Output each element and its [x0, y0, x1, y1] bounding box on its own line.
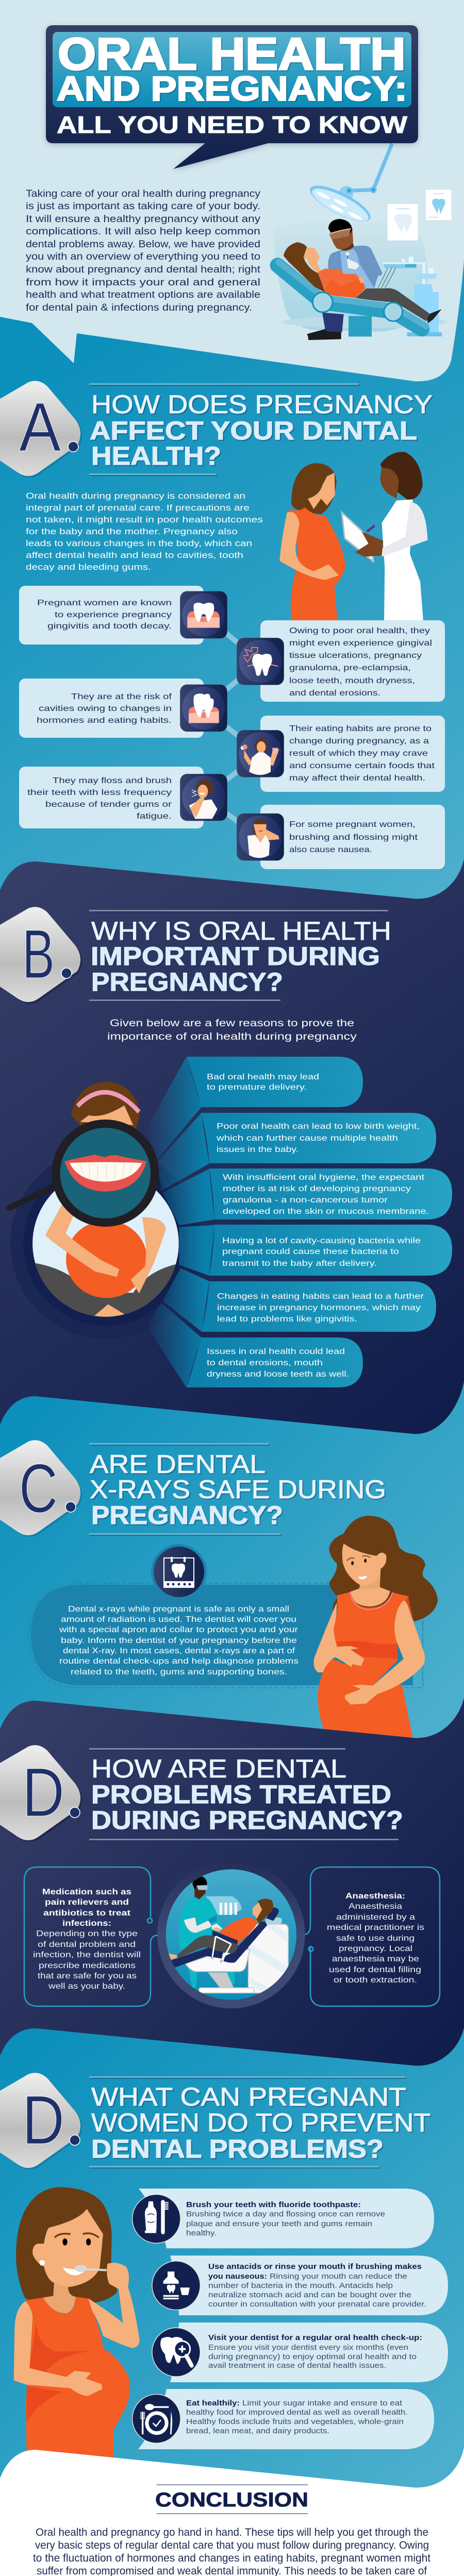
card: nausea: also cause nausea. — [289, 845, 372, 854]
tip pill: antacids: counter in consultation with your prenatal care provider. — [208, 2300, 426, 2309]
tip pill: eat healthily: Healthy foods include fruits and vegetables, whole-grain — [186, 2418, 404, 2426]
heading B — [89, 910, 391, 1001]
card: nausea — [260, 805, 445, 869]
title text: AND PREGNANCY: — [57, 70, 407, 108]
intro paragraph: know about pregnancy and dental health; right — [26, 264, 261, 275]
section B intro text: Given below are a few reasons to prove the — [110, 1018, 354, 1029]
pill: bacteria transmission — [209, 1225, 452, 1276]
x-ray info panel: routine dental check-ups and help diagnose problems — [59, 1657, 299, 1666]
card: nausea: brushing and flossing might — [289, 833, 418, 842]
box: anaesthesia: used for dental filling — [329, 1965, 421, 1974]
card: eating habits: and consume certain foods that — [289, 761, 435, 770]
card: less brushing: They may floss and brush — [53, 776, 172, 785]
card: gingivitis: Pregnant women are known — [37, 599, 172, 607]
box: anaesthesia: pregnancy. Local — [339, 1944, 412, 1953]
card: eating habits: result of which they may crave — [289, 749, 428, 758]
heading D second: WOMEN DO TO PREVENT — [91, 2108, 430, 2137]
section C: are dental x-rays safe — [0, 1381, 464, 1752]
section A paragraph: not taken, it might result in poor health outcomes — [26, 515, 263, 524]
card: ulcerations: granuloma, pre-eclampsia, — [289, 664, 411, 672]
icon: woman craving food — [237, 730, 284, 777]
pill: low birth weight: Poor oral health can lead to low birth weight, — [217, 1122, 420, 1131]
box: medication: of dental problem and — [38, 1940, 136, 1949]
tip pill: antacids: number of bacteria in the mouth. Antacids help — [208, 2282, 393, 2290]
pill: bacteria transmission: Having a lot of cavity-causing bacteria while — [222, 1236, 421, 1245]
heading D second — [89, 2076, 430, 2167]
box: medication: well as your baby. — [48, 1982, 125, 1991]
card: nausea: For some pregnant women, — [289, 820, 416, 829]
box: anaesthesia: Anaesthesia: — [345, 1892, 405, 1901]
heading A: HEALTH? — [91, 442, 221, 470]
box: medication: pain relievers and — [45, 1898, 129, 1907]
conclusion paragraph: to the fluctuation of hormones and changes in eating habits, pregnant women might — [33, 2552, 430, 2564]
tip pill: eat healthily: healthy food for improved dental as well as overall health. — [186, 2409, 408, 2417]
intro paragraph: Taking care of your oral health during pregnancy — [26, 189, 261, 199]
tip pill: eat healthily: Eat healthily: — [186, 2399, 240, 2408]
pill: erosions: Issues in oral health could lead — [207, 1347, 345, 1356]
conclusion paragraph: Oral health and pregnancy go hand in hand. These tips will help you get through the — [36, 2527, 428, 2538]
heading C — [89, 1443, 386, 1535]
box: anaesthesia: safe to use during — [336, 1934, 415, 1943]
illustration: pregnant woman brushing teeth — [14, 2187, 140, 2458]
card: ulcerations: tissue ulcerations, pregnancy — [289, 651, 422, 660]
section B intro text: importance of oral health during pregnancy — [107, 1031, 357, 1042]
card: less brushing — [19, 767, 204, 828]
card: cavities — [19, 679, 204, 738]
badge A: A — [19, 389, 61, 466]
section A paragraph: affect dental health and lead to cavities, tooth — [26, 551, 243, 560]
box: anaesthesia: anaesthesia may be — [332, 1955, 419, 1963]
pill: bacteria transmission: transmit to the baby after delivery. — [222, 1259, 377, 1268]
tip pill: antacids — [170, 2256, 448, 2315]
card: less brushing: fatigue. — [137, 812, 172, 821]
x-ray info panel: amount of radiation is used. The dentist will cover you — [61, 1615, 296, 1624]
badge B: B — [22, 916, 55, 993]
icon: tooth with inflamed gum — [180, 591, 227, 638]
badge D — [0, 1745, 82, 1842]
section A paragraph: for the baby and the mother. Pregnancy also — [26, 527, 238, 536]
x-ray info panel: with a special apron and collar to protect you and your — [59, 1625, 299, 1634]
icon: tooth under magnifier — [152, 2328, 200, 2377]
pill: eating habits — [202, 1281, 436, 1332]
badge C: C — [19, 1450, 58, 1527]
tip pill: fluoride toothpaste — [139, 2189, 434, 2248]
card: cavities: cavities owing to changes in — [39, 704, 172, 713]
tip pill: visit dentist: Visit your dentist for a regular oral health check-up: — [208, 2334, 422, 2342]
heading C: ARE DENTAL — [90, 1450, 266, 1479]
conclusion paragraph — [33, 2527, 430, 2576]
box: medication: Medication such as — [42, 1888, 131, 1896]
card: cavities: They are at the risk of — [71, 692, 172, 701]
heading D second: WHAT CAN PREGNANT — [91, 2082, 406, 2111]
intro paragraph — [26, 189, 261, 313]
conclusion heading: CONCLUSION — [155, 2489, 308, 2511]
section A: how pregnancy affects dental health — [0, 260, 464, 917]
title speech bubble — [46, 25, 418, 169]
card: gingivitis: gingivitis and tooth decay. — [47, 622, 172, 631]
section A paragraph: integral part of prenatal care. If precautions are — [26, 503, 250, 513]
tip pill: visit dentist: during pregnancy) to enjoy optimal oral health and to — [208, 2353, 417, 2361]
background: header panel — [0, 0, 464, 422]
illustration: dentist treating pregnant patient — [273, 143, 451, 340]
card: eating habits: change during pregnancy, as a — [289, 737, 429, 745]
section A paragraph: leads to various changes in the body, which can — [26, 539, 252, 548]
section: conclusion — [0, 2447, 464, 2576]
conclusion paragraph: very basic steps of regular dental care that you must follow during pregnancy. Owing — [35, 2539, 429, 2551]
tip pill: fluoride toothpaste: healthy. — [186, 2229, 217, 2238]
heading B: WHY IS ORAL HEALTH — [91, 917, 391, 945]
box: medication: infection, the dentist will — [33, 1951, 141, 1959]
pill: erosions: dryness and loose teeth as well. — [207, 1370, 349, 1379]
illustration: pregnant woman smiling — [313, 1516, 438, 1738]
card: ulcerations: and dental erosions. — [289, 689, 380, 698]
tip pill: antacids: neutralize stomach acid and can be bought over the — [208, 2291, 411, 2299]
tip pill: visit dentist: Ensure you visit your dentist every six months (even — [208, 2344, 408, 2352]
heading C: X-RAYS SAFE DURING — [90, 1475, 386, 1504]
card: gingivitis: to experience pregnancy — [55, 611, 172, 619]
x-ray info panel: dental X-ray. In most cases, dental x-rays are a part of — [63, 1647, 295, 1655]
icon: mouth rinse — [152, 2261, 200, 2310]
heading D: HOW ARE DENTAL — [91, 1754, 346, 1783]
badge C — [0, 1440, 82, 1537]
circle halo behind the woman — [10, 1148, 201, 1339]
pill: premature delivery: Bad oral health may lead — [207, 1073, 319, 1081]
tip pill: fluoride toothpaste: Brushing twice a day and flossing once can remove — [186, 2210, 385, 2218]
heading B: IMPORTANT DURING — [91, 942, 380, 971]
box: anaesthesia: administered by a — [336, 1913, 415, 1922]
pill: pregnancy granuloma — [209, 1168, 452, 1219]
tip pill: eat healthily: bread, lean meat, and dairy products. — [186, 2427, 329, 2435]
card: less brushing: their teeth with less frequency — [27, 788, 172, 797]
pill: pregnancy granuloma: developed on the skin or mucous membrane. — [223, 1207, 429, 1216]
illustration: pregnant woman and doctor — [279, 452, 427, 620]
intro paragraph: dental problems away. Below, we have provided — [26, 239, 260, 250]
title text — [57, 28, 408, 138]
title text: ALL YOU NEED TO KNOW — [57, 111, 408, 138]
heading D: PROBLEMS TREATED — [91, 1780, 391, 1809]
pill: low birth weight: which can further cause multiple health — [216, 1134, 398, 1143]
icon: woman with tender gums — [180, 774, 227, 821]
card: eating habits: Their eating habits are prone to — [289, 724, 432, 733]
connector bands between icons — [204, 615, 260, 837]
badge D second: D — [22, 2082, 64, 2159]
heading C: PREGNANCY? — [91, 1501, 283, 1530]
icons column for section A — [180, 591, 284, 860]
card: eating habits: may affect their dental health. — [289, 774, 425, 783]
box: anaesthesia — [294, 1867, 440, 2006]
card: gingivitis — [19, 586, 204, 645]
tip pill: antacids: you nauseous: — [208, 2273, 267, 2281]
fan wedges leading to reasons — [146, 1057, 214, 1388]
card: ulcerations: might even experience gingival — [289, 639, 432, 648]
badge D: D — [22, 1754, 64, 1831]
box: anaesthesia: Anaesthesia — [349, 1902, 402, 1911]
card: ulcerations: Owing to poor oral health, they — [289, 626, 430, 635]
section B: why oral health is important — [0, 859, 464, 1443]
section D2: what pregnant women can do — [0, 2027, 464, 2494]
tip pill: antacids: Rinsing your mouth can reduce the — [270, 2273, 407, 2281]
section D: how dental problems are treated — [0, 1698, 464, 2071]
icon: toothpaste and brush — [132, 2194, 180, 2243]
heading A: AFFECT YOUR DENTAL — [90, 416, 417, 445]
intro paragraph: for dental pain & infections during pregnancy. — [26, 302, 252, 313]
pill: pregnancy granuloma: mother is at risk of developing pregnancy — [223, 1184, 411, 1193]
pill: low birth weight — [201, 1113, 436, 1163]
box: anaesthesia: medical practitioner is — [327, 1923, 424, 1932]
reason pills — [187, 1057, 452, 1387]
section A paragraph — [26, 492, 263, 572]
card: eating habits — [260, 716, 445, 792]
tip pill: antacids: Use antacids or rinse your mouth if brushing makes — [208, 2263, 422, 2271]
pill: bacteria transmission: pregnant could cause these bacteria to — [222, 1247, 399, 1256]
x-ray info panel: Dental x-rays while pregnant is safe as only a small — [68, 1605, 289, 1614]
pill: eating habits: Changes in eating habits can lead to a further — [217, 1292, 424, 1301]
heading B: PREGNANCY? — [91, 968, 283, 996]
tip pill: visit dentist: avail treatment in case of dental health issues. — [208, 2362, 386, 2370]
tip pill: fluoride toothpaste: plaque and ensure your teeth and gums remain — [186, 2220, 372, 2228]
heading D: DURING PREGNANCY? — [91, 1806, 403, 1835]
badge A — [0, 381, 82, 478]
section A paragraph: decay and bleeding gums. — [26, 563, 151, 572]
intro paragraph: you with an overview of everything you need to — [26, 251, 260, 262]
pill: low birth weight: issues in the baby. — [217, 1145, 299, 1154]
intro paragraph: It will ensure a healthy pregnancy without any — [26, 214, 261, 225]
icon: tooth pain burst — [237, 638, 284, 685]
illustration: pregnant woman with magnifier over smile — [9, 1082, 180, 1319]
badge D second — [0, 2073, 82, 2170]
pill: premature delivery: to premature delivery. — [207, 1083, 307, 1092]
x-ray info panel: baby. Inform the dentist of your pregnancy before the — [61, 1636, 297, 1645]
x-ray info panel: related to the teeth, gums and supporting bones. — [71, 1668, 287, 1676]
tip pill: eat healthily — [138, 2389, 434, 2449]
heading D second: DENTAL PROBLEMS? — [91, 2134, 384, 2163]
heading A — [89, 383, 433, 475]
icon: healthy plate — [132, 2394, 180, 2443]
icon: dental x-ray machine — [151, 1544, 207, 1600]
icon: woman feeling nausea — [237, 814, 284, 860]
tip pill: eat healthily: Limit your sugar intake and ensure to eat — [242, 2399, 402, 2408]
card: ulcerations — [260, 620, 445, 702]
intro paragraph: is just as important as taking care of your body. — [26, 201, 260, 212]
pill: eating habits: lead to problems like gingivitis. — [217, 1315, 357, 1324]
x-ray info panel — [29, 1583, 423, 1688]
box: anaesthesia: or tooth extraction. — [334, 1976, 417, 1985]
icon: decayed tooth — [180, 685, 227, 732]
section B intro text — [107, 1018, 357, 1042]
box: medication — [24, 1867, 168, 2006]
box: medication: Depending on the type — [36, 1929, 138, 1938]
illustration: dentist in circle — [157, 1861, 305, 2008]
intro paragraph: complications. It will also help keep common — [26, 226, 260, 237]
pill: eating habits: increase in pregnancy hormones, which may — [217, 1303, 421, 1312]
pill: pregnancy granuloma: granuloma - a non-cancerous tumor — [223, 1196, 388, 1205]
title text: ORAL HEALTH — [58, 28, 406, 79]
box: medication: that are safe for you as — [38, 1972, 137, 1980]
box: medication: prescribe medications — [39, 1961, 136, 1970]
badge B — [0, 907, 82, 1004]
pill: erosions — [187, 1337, 363, 1387]
card: ulcerations: loose teeth, mouth dryness, — [289, 676, 415, 685]
intro paragraph: health and what treatment options are available — [26, 290, 260, 300]
box: medication: infections: — [62, 1919, 111, 1928]
tip pill: visit dentist — [170, 2323, 448, 2382]
box: medication: antibiotics to treat — [43, 1909, 131, 1918]
pill: erosions: to dental erosions, mouth — [207, 1359, 323, 1367]
pill: premature delivery — [187, 1057, 363, 1107]
heading D — [89, 1748, 403, 1840]
pill: pregnancy granuloma: With insufficient oral hygiene, the expectant — [223, 1173, 425, 1182]
section A paragraph: Oral health during pregnancy is considered an — [26, 492, 245, 501]
card: cavities: hormones and eating habits. — [37, 716, 172, 725]
intro paragraph: from how it impacts your oral and general — [26, 277, 260, 288]
heading A: HOW DOES PREGNANCY — [91, 390, 433, 419]
card: less brushing: because of tender gums or — [45, 800, 172, 809]
tip pill: fluoride toothpaste: Brush your teeth with fluoride toothpaste: — [186, 2201, 361, 2209]
